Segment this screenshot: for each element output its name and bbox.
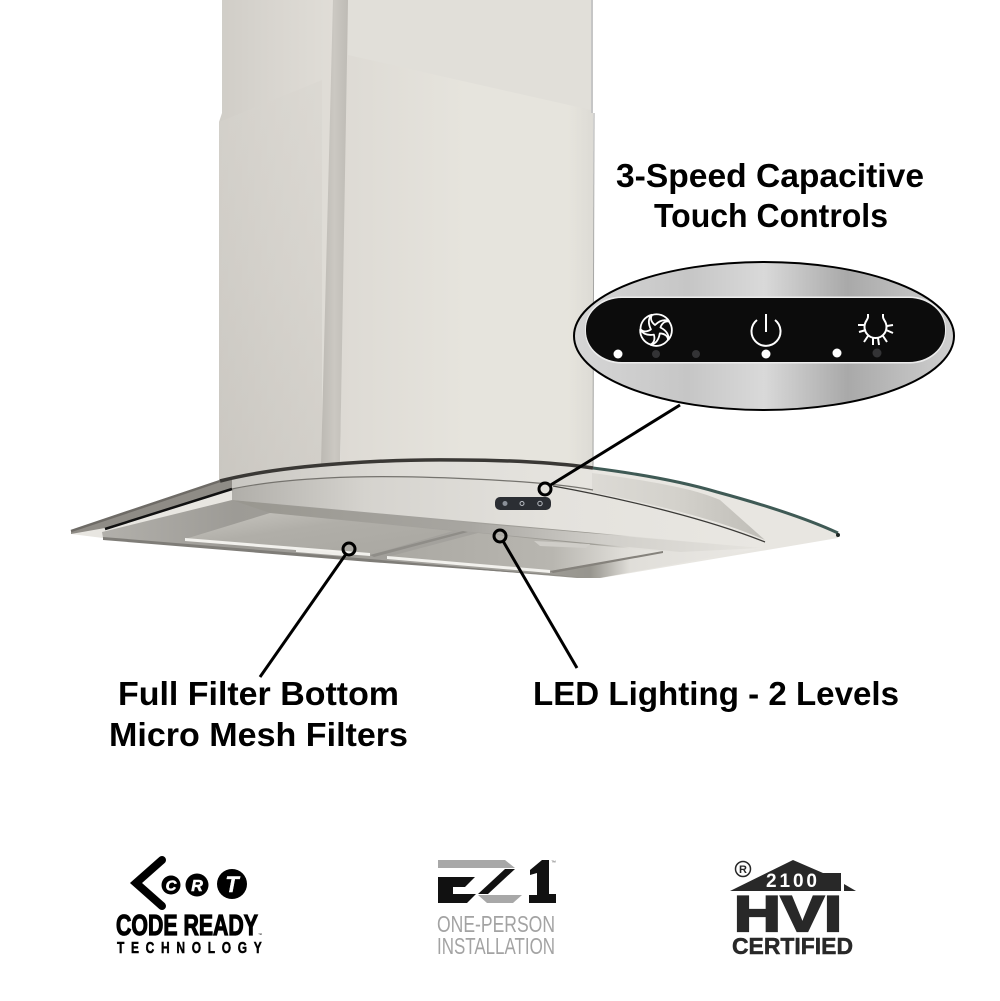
hood underside bbox=[102, 500, 762, 578]
callout leader: touch controls bbox=[539, 405, 680, 495]
CRT badges bbox=[162, 869, 247, 899]
registered mark: R bbox=[739, 864, 747, 876]
mesh filter right bbox=[387, 533, 663, 571]
heading: touch controls: 3-Speed Capacitive bbox=[616, 157, 924, 194]
hood body front panel bbox=[232, 477, 765, 548]
heading: touch controls bbox=[616, 157, 924, 234]
glass canopy bbox=[71, 460, 838, 578]
logo: HVI certified: HVI bbox=[734, 886, 842, 942]
left glass band bbox=[71, 480, 232, 534]
CRT badges: T bbox=[225, 872, 240, 897]
mesh filter left bbox=[185, 513, 453, 555]
callout leader: mesh filters bbox=[260, 543, 355, 677]
heading: filters: Full Filter Bottom bbox=[118, 675, 399, 712]
bottom edge bbox=[103, 537, 590, 578]
icon: power bbox=[752, 314, 780, 346]
heading: touch controls: Touch Controls bbox=[654, 197, 888, 234]
logo: EZ1 one-person installation: ONE-PERSON bbox=[437, 911, 555, 937]
heading: filters: Micro Mesh Filters bbox=[109, 716, 408, 753]
logo: HVI certified bbox=[730, 860, 856, 959]
heading: filters bbox=[109, 675, 408, 753]
heading: LED lighting: LED Lighting - 2 Levels bbox=[533, 675, 899, 712]
front lip bbox=[232, 500, 762, 552]
logo: HVI certified: CERTIFIED bbox=[732, 933, 853, 959]
logo: HVI certified: 2100 bbox=[766, 871, 817, 892]
icon: chevron bbox=[136, 860, 162, 906]
black touch panel bbox=[585, 296, 946, 364]
glass side wedge bbox=[592, 473, 765, 540]
indicator lights bbox=[614, 348, 882, 358]
hood control panel bbox=[495, 497, 551, 510]
logo: Code Ready Technology bbox=[116, 860, 262, 956]
CRT badges: C bbox=[166, 878, 178, 894]
CRT badges: R bbox=[191, 878, 203, 895]
chimney duct bbox=[219, 0, 594, 482]
logo: EZ1 one-person installation bbox=[437, 860, 556, 959]
logo: Code Ready Technology: ™ bbox=[258, 932, 262, 937]
logo: EZ1 one-person installation: INSTALLATION bbox=[437, 933, 555, 959]
logo: Code Ready Technology: TECHNOLOGY bbox=[117, 938, 262, 956]
callout: control panel magnifier bbox=[574, 262, 954, 410]
range hood product photo bbox=[71, 0, 840, 578]
logo: Code Ready Technology: CODE READY bbox=[116, 910, 258, 942]
icon: fan bbox=[636, 313, 675, 350]
house roof bbox=[730, 860, 827, 891]
icon: light bulb bbox=[858, 314, 893, 345]
callout leader: LED lighting bbox=[494, 530, 577, 668]
EZ1 mark: ™ bbox=[551, 860, 556, 866]
glass dark upper edge bbox=[220, 460, 593, 481]
hood upper band bbox=[232, 460, 593, 490]
